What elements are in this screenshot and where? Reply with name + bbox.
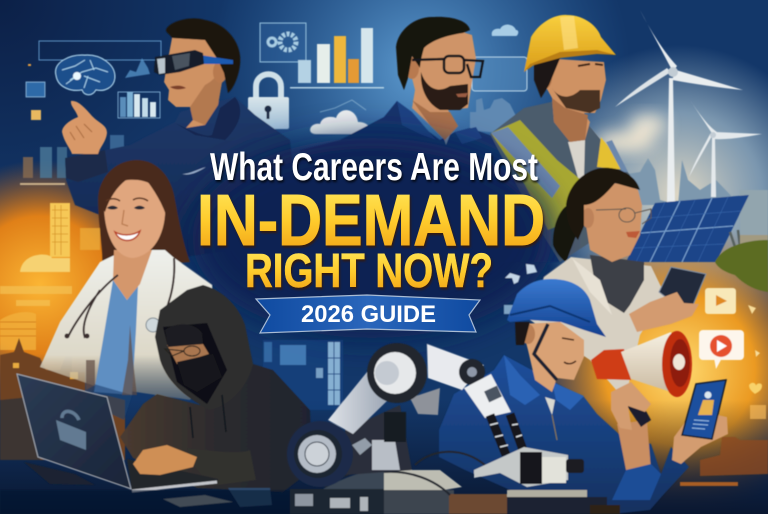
upper arm: [328, 372, 390, 434]
ribbon banner: 2026 guide: [256, 295, 480, 333]
hair: [396, 17, 470, 90]
gradient edge: bottom vignette: [0, 490, 290, 514]
face: [167, 344, 209, 364]
hood: [155, 285, 253, 410]
person: tech professional with glasses: [290, 17, 560, 262]
glasses: [596, 208, 651, 224]
desk items: [24, 462, 272, 507]
social media icons: [680, 288, 768, 486]
cables: [325, 452, 485, 495]
neck and face: [410, 25, 476, 140]
bar chart: [290, 28, 384, 88]
lower pivot joint: [287, 421, 353, 487]
tablet: [659, 267, 706, 315]
glasses: [412, 56, 483, 77]
icon: padlock: [248, 74, 289, 129]
laptop: [17, 374, 218, 492]
pointing hand: [62, 101, 107, 154]
forearm: [427, 344, 484, 390]
forearm holding megaphone: [617, 420, 651, 470]
Nike-like swoosh logo: [182, 167, 206, 175]
hand on handle: [611, 382, 651, 430]
lab coat: [530, 257, 665, 400]
long hair: [98, 160, 190, 270]
sleeve: [187, 448, 256, 486]
icon: AI brain: [55, 55, 115, 95]
hoodie: [65, 97, 300, 262]
polo shirt: [290, 101, 560, 262]
blue helmet: [507, 279, 606, 337]
robotic arm: [287, 343, 620, 514]
nose: [122, 210, 128, 226]
collar: [504, 355, 584, 410]
wind turbine large: [615, 10, 743, 202]
face: [104, 180, 165, 258]
icon: play bubble: [705, 288, 736, 314]
base machinery: [290, 470, 620, 514]
neck: [113, 250, 152, 300]
megaphone: [591, 331, 692, 397]
keyboard deck: [127, 459, 218, 492]
heading line 2: IN-DEMAND: [197, 181, 545, 261]
body: [120, 364, 312, 492]
wind turbine small: [689, 100, 762, 197]
hair: [566, 168, 640, 240]
shirt: [490, 100, 640, 262]
icon: smartphone: [682, 380, 726, 439]
hand: [629, 292, 699, 332]
wrist struts: [490, 414, 523, 455]
hair: [166, 18, 240, 93]
ponytail: [553, 205, 580, 262]
sparkle puzzle pieces: [504, 264, 537, 314]
title block: [197, 146, 545, 333]
mask: [177, 354, 222, 392]
top joint: [367, 343, 427, 403]
undershirt: [545, 397, 555, 415]
sleeve: [612, 464, 661, 500]
person: construction engineer with hard hat: [490, 15, 640, 262]
typing hand: [133, 445, 197, 475]
lower centre city data panels: [263, 340, 343, 410]
visor: [200, 55, 233, 64]
small chart panel: [118, 58, 160, 118]
heading line 1: What Careers Are Most: [210, 146, 538, 189]
person: AI engineer with visor: [62, 18, 300, 262]
left orange city: glowing buildings: [0, 203, 125, 460]
distant city skylines: [452, 25, 768, 250]
hard hat: [524, 15, 616, 72]
ear: [213, 61, 227, 83]
solar panels: [626, 195, 768, 262]
person: engineer with blue helmet and megaphone: [439, 279, 728, 514]
tech dashboard: gears, bars, padlock, cloud: [248, 23, 384, 134]
face: [582, 183, 642, 262]
lab coat: [40, 250, 215, 400]
scrubs: [94, 280, 138, 395]
smile: [115, 231, 140, 241]
lips: [626, 231, 640, 238]
neck and face: [521, 322, 584, 392]
eyes: [107, 206, 145, 210]
glasses: [165, 346, 200, 356]
chin strap: [534, 324, 557, 380]
stethoscope: [68, 258, 174, 338]
icon: gears panel: [260, 23, 306, 62]
handle: [621, 384, 651, 427]
face and neck: [541, 58, 606, 142]
title backdrop glow: [192, 138, 552, 338]
heading line 3: RIGHT NOW?: [245, 245, 493, 298]
face: [164, 30, 225, 128]
tech dashboard: AI brain and charts: [20, 41, 161, 185]
white t-shirt: [568, 140, 585, 180]
person: cybersecurity analyst in dark hoodie: [120, 285, 312, 492]
person: doctor: [40, 160, 215, 420]
icon: lock on laptop: [56, 411, 86, 450]
icon: video bubble: [699, 330, 744, 369]
icon: cloud: [310, 110, 369, 134]
ribbon banner: 2026 guide: 2026 GUIDE: [301, 301, 436, 328]
tool head: [474, 447, 568, 487]
inner hood: [163, 323, 227, 404]
person: woman with tablet: [530, 168, 706, 400]
body block: [345, 388, 440, 475]
small widgets: [20, 64, 124, 185]
eye and smile: [562, 338, 576, 364]
clouds behind turbines: [595, 115, 666, 152]
coverall: [439, 355, 689, 514]
beard: [421, 72, 468, 110]
safety vest: [491, 120, 581, 230]
lower arm: [464, 374, 511, 418]
hand holding phone: [672, 410, 728, 464]
bushes: [715, 240, 768, 292]
brows: [106, 198, 148, 201]
drawstrings: [190, 395, 226, 438]
